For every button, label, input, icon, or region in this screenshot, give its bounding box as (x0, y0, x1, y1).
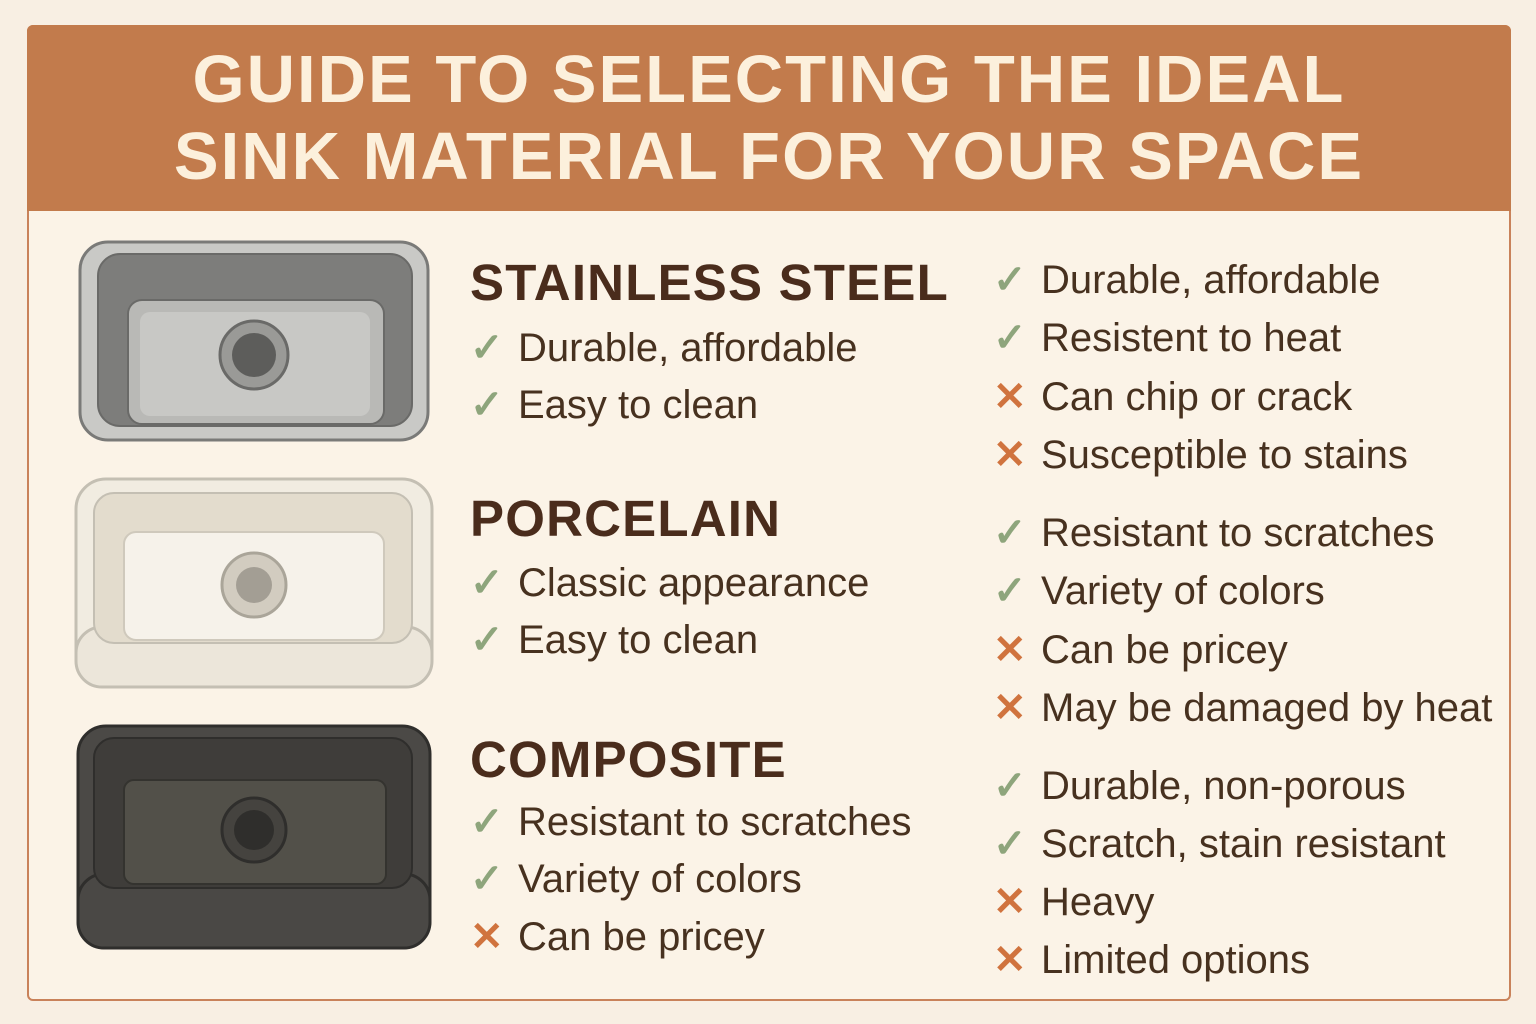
list: right group 3 (993, 764, 1446, 982)
list: right group 3: ✕ (993, 938, 1027, 982)
list: right group 1: Resistent to heat (1041, 316, 1341, 360)
icon: porcelain sink (74, 478, 434, 688)
list: stainless steel left: ✓ (470, 383, 504, 427)
list: composite left: ✕ (470, 915, 504, 959)
list: porcelain left (470, 561, 869, 662)
title (174, 42, 1364, 194)
list: stainless steel left: ✓ (470, 326, 504, 370)
list: porcelain left: Easy to clean (518, 618, 758, 662)
list: right group 2: Can be pricey (1041, 628, 1288, 672)
heading: stainless steel: STAINLESS STEEL (470, 254, 949, 311)
header band (27, 25, 1511, 211)
list: right group 1: ✓ (993, 258, 1027, 302)
list: right group 1 (993, 258, 1408, 477)
list: stainless steel left (470, 326, 858, 427)
list: composite left: Can be pricey (518, 915, 765, 959)
icon: stainless steel sink (78, 240, 430, 442)
list: right group 3: Scratch, stain resistant (1041, 822, 1446, 866)
list: right group 2: ✓ (993, 569, 1027, 613)
title: GUIDE TO SELECTING THE IDEAL (193, 42, 1345, 117)
list: right group 3: ✓ (993, 822, 1027, 866)
icon: composite sink (76, 724, 432, 950)
list: stainless steel left: Durable, affordable (518, 326, 858, 370)
list: right group 1: ✕ (993, 433, 1027, 477)
list: composite left: ✓ (470, 800, 504, 844)
list: right group 2: May be damaged by heat (1041, 686, 1492, 730)
list: right group 3: Limited options (1041, 938, 1310, 982)
list: composite left (470, 800, 912, 959)
list: right group 2: ✕ (993, 686, 1027, 730)
list: right group 3: ✓ (993, 764, 1027, 808)
list: right group 3: ✕ (993, 880, 1027, 924)
list: composite left: Resistant to scratches (518, 800, 912, 844)
title: SINK MATERIAL FOR YOUR SPACE (174, 119, 1364, 194)
list: right group 2: Resistant to scratches (1041, 511, 1434, 555)
list: right group 2 (993, 511, 1492, 730)
heading: porcelain: PORCELAIN (470, 490, 781, 547)
list: porcelain left: ✓ (470, 561, 504, 605)
list: right group 2: Variety of colors (1041, 569, 1325, 613)
list: right group 2: ✕ (993, 628, 1027, 672)
list: right group 3: Durable, non-porous (1041, 764, 1406, 808)
list: right group 1: Can chip or crack (1041, 375, 1352, 419)
list: right group 1: ✕ (993, 375, 1027, 419)
heading: composite: COMPOSITE (470, 731, 787, 788)
list: composite left: Variety of colors (518, 857, 802, 901)
list: stainless steel left: Easy to clean (518, 383, 758, 427)
list: right group 2: ✓ (993, 511, 1027, 555)
list: porcelain left: ✓ (470, 618, 504, 662)
list: right group 1: ✓ (993, 316, 1027, 360)
list: right group 1: Durable, affordable (1041, 258, 1380, 302)
list: composite left: ✓ (470, 857, 504, 901)
list: right group 3: Heavy (1041, 880, 1154, 924)
list: porcelain left: Classic appearance (518, 561, 869, 605)
list: right group 1: Susceptible to stains (1041, 433, 1408, 477)
